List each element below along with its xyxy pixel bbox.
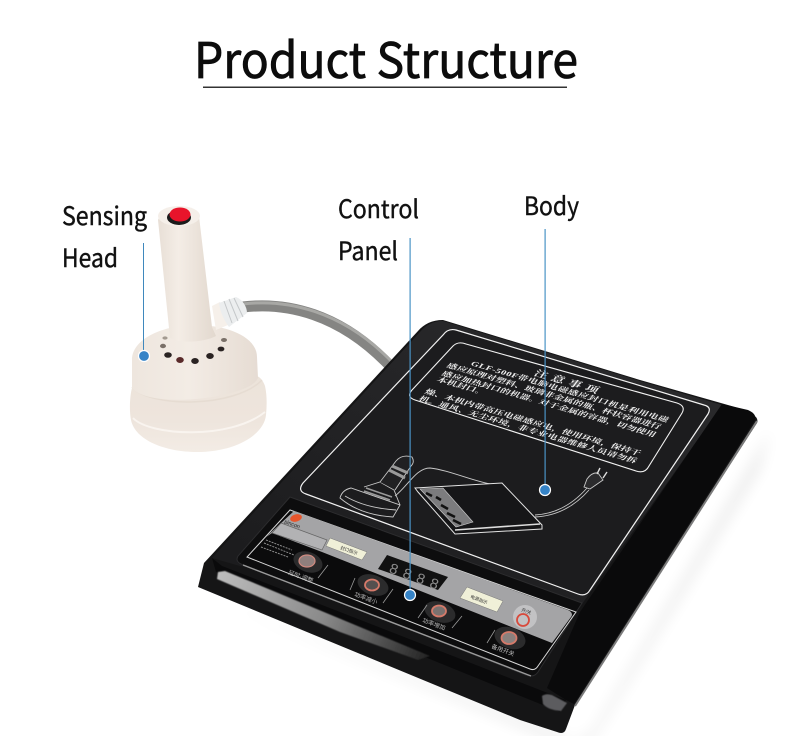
digital display: 8888 bbox=[386, 561, 441, 594]
flange base of the head bbox=[130, 376, 267, 452]
instruction text: GLF-500F带电脑电磁感应封口机是利用电磁 bbox=[469, 359, 673, 424]
right indicator label bbox=[460, 587, 503, 612]
sensing head bbox=[130, 206, 267, 452]
callout: sensing head: Sensing bbox=[62, 197, 147, 233]
right indicator label: 电源指示 bbox=[469, 593, 489, 606]
knob: spare switch bbox=[490, 623, 529, 658]
red button bbox=[167, 208, 191, 225]
callout: sensing head: Head bbox=[62, 239, 118, 275]
instruction title: 注意事项 bbox=[531, 368, 603, 396]
illustration: device bbox=[415, 483, 542, 534]
note text block bbox=[261, 540, 294, 557]
vent holes bbox=[160, 336, 227, 364]
plate illustration: sealer and power cord bbox=[340, 456, 607, 534]
right edge reflection bbox=[575, 421, 757, 706]
dark front channel bbox=[212, 558, 566, 712]
illustration: sensing head bbox=[340, 456, 413, 517]
title: Product Structure bbox=[194, 22, 578, 93]
left indicator label bbox=[326, 538, 367, 560]
instruction text: 燥、本机内带高压电磁感应电，使用环境，保持干 bbox=[421, 387, 644, 458]
induction sealer body bbox=[198, 320, 770, 736]
callout: body: Body bbox=[524, 187, 579, 223]
digital display bbox=[378, 555, 448, 594]
right side band bbox=[547, 404, 755, 704]
power button: 开/关 bbox=[520, 606, 533, 617]
front lip highlight bbox=[217, 571, 430, 660]
brand logo bbox=[283, 513, 303, 530]
instruction text: 感应加热封口的机器。对于金属的容器，切勿使用 bbox=[439, 369, 659, 439]
callout: control panel bbox=[338, 190, 419, 600]
knob: spare switch: 备用开关 bbox=[490, 642, 516, 658]
callout: control panel: Control bbox=[338, 190, 419, 226]
knob: delay: 延时·调整 bbox=[287, 568, 314, 585]
product name plate bbox=[272, 523, 327, 550]
knob: power up: 功率增加 bbox=[421, 616, 447, 632]
cable bbox=[243, 303, 394, 368]
illustration: cord to device bbox=[395, 468, 490, 496]
upper housing of the head bbox=[132, 325, 258, 400]
instruction text: 本机封口。 bbox=[435, 375, 489, 396]
left indicator label: 封口指示 bbox=[339, 544, 359, 557]
control panel bbox=[243, 510, 576, 676]
callout: control panel: Panel bbox=[338, 232, 398, 268]
callout: body bbox=[524, 187, 579, 496]
callout: sensing head bbox=[62, 197, 150, 362]
upper plate bbox=[301, 330, 709, 595]
knob: power down: 功率减小 bbox=[353, 590, 379, 606]
drop shadow bbox=[215, 430, 770, 736]
gray strip bbox=[266, 511, 572, 643]
secondary edge line bbox=[243, 565, 531, 676]
brand logo: pincon bbox=[283, 519, 301, 530]
button divider ticks bbox=[318, 565, 495, 643]
power button bbox=[513, 605, 537, 629]
outer shell bbox=[198, 320, 757, 733]
instruction box bbox=[410, 343, 683, 472]
cable connector bbox=[212, 297, 247, 330]
instruction text: 机。通风、无尘环境，非专业电器维修人员请勿拆 bbox=[416, 394, 640, 465]
corner highlight bbox=[542, 694, 567, 711]
illustration: power cord and plug bbox=[535, 468, 607, 517]
knob: power down bbox=[353, 570, 391, 606]
control recess bbox=[237, 497, 582, 676]
knob: power up bbox=[421, 597, 458, 632]
column handle bbox=[158, 212, 216, 342]
instruction text: 感应原理对塑料、玻璃非金属的瓶、杯状容器进行 bbox=[445, 361, 664, 431]
knob: delay bbox=[287, 547, 326, 585]
top bevel bbox=[212, 321, 722, 604]
instruction text bbox=[416, 359, 673, 465]
column top bbox=[158, 206, 200, 226]
lower panel background bbox=[247, 510, 576, 670]
